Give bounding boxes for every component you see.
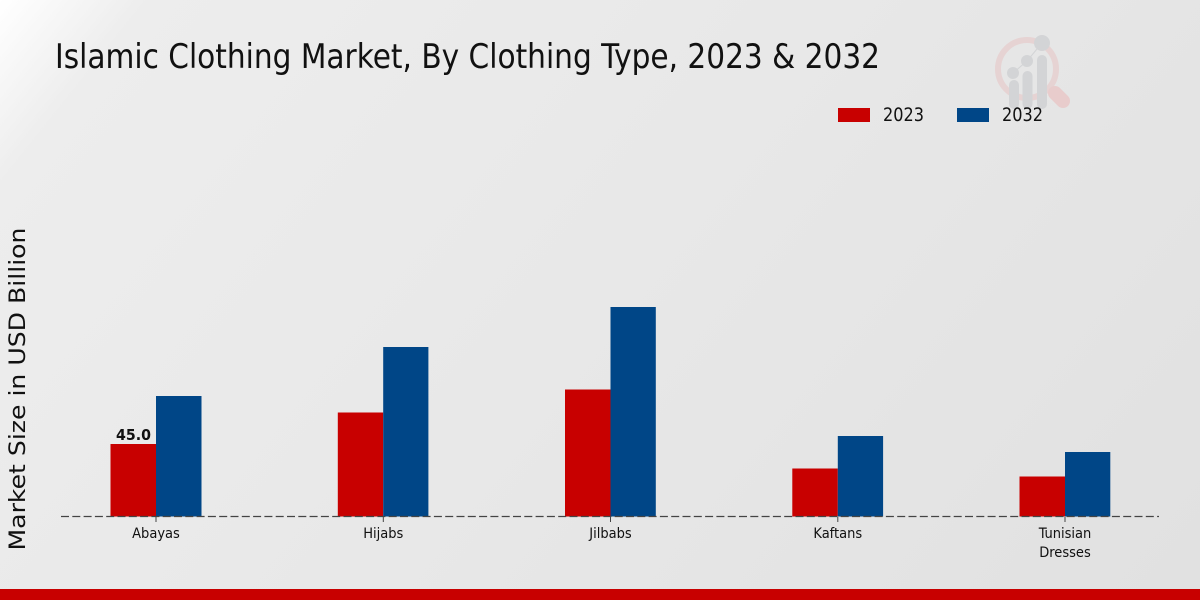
legend item: 2032: [957, 105, 1043, 126]
bars: Tunisian Dresses: [1020, 452, 1110, 516]
legend item: 2023: 2023: [883, 105, 924, 126]
category label: Abayas: Abayas: [132, 526, 180, 542]
category label: Kaftans: Kaftans: [813, 526, 862, 542]
legend item: 2032: 2032: [1002, 105, 1043, 126]
data label: 45.0: [116, 426, 151, 444]
title: Islamic Clothing Market, By Clothing Type, 2023 & 2032: [55, 37, 880, 77]
category label: Tunisian Dresses: Tunisian: [1038, 526, 1091, 542]
icon: watermark logo: [998, 35, 1063, 104]
x axis baseline: [61, 516, 1159, 518]
category label: Tunisian Dresses: Dresses: [1039, 545, 1091, 561]
bar chart: [61, 307, 1159, 561]
bars: Abayas: [110, 396, 202, 516]
category label: Jilbabs: Jilbabs: [588, 526, 632, 542]
category label: Hijabs: Hijabs: [363, 526, 404, 542]
bars: Jilbabs: [565, 307, 656, 516]
bars: Hijabs: [338, 347, 428, 516]
legend item: 2023: [838, 105, 924, 126]
footer bar: [0, 589, 1200, 600]
legend: [838, 105, 1043, 126]
bars: Kaftans: [792, 436, 883, 516]
y axis title: Market Size in USD Billion: [5, 228, 31, 550]
